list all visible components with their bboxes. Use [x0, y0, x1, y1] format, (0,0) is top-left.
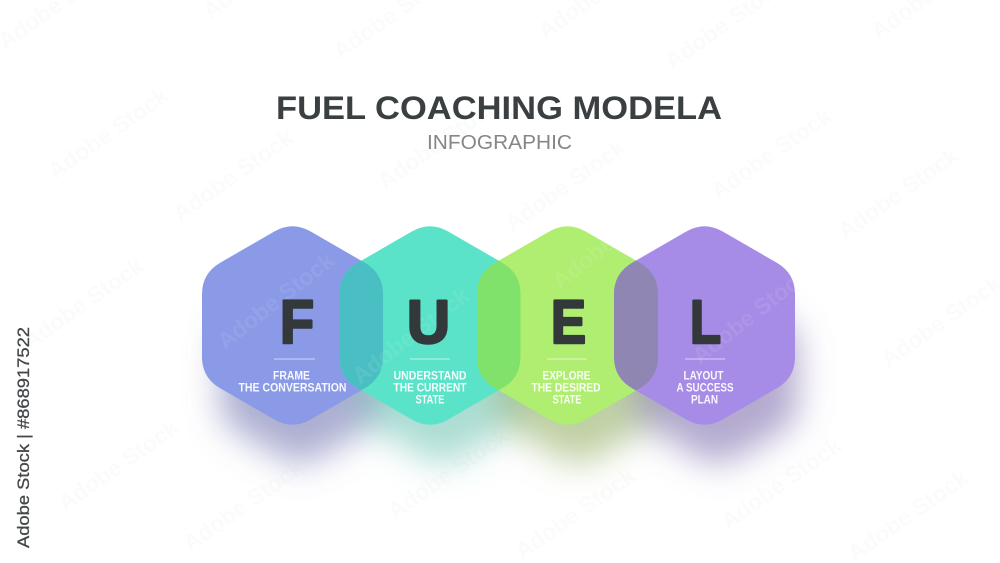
subtitle: INFOGRAPHIC: [427, 132, 572, 154]
letter U: U: [407, 288, 450, 356]
label: explore the desired state: [532, 358, 600, 406]
label: layout a success plan: [676, 358, 734, 406]
watermark pattern on background: Adobe Stock: [500, 134, 630, 236]
watermark pattern on background: Adobe Stock: [510, 462, 640, 563]
label: frame the conversation: FRAME: [273, 370, 310, 382]
side credit text: Adobe Stock | #868917522: [14, 327, 33, 548]
watermark pattern on background: Adobe Stock: [373, 92, 503, 194]
overlap E and L: [614, 260, 658, 390]
label: layout a success plan: LAYOUT: [684, 370, 724, 382]
letter L: L: [690, 288, 721, 356]
watermark over hexagons: Adobe Stock: [212, 247, 339, 354]
label: layout a success plan: PLAN: [691, 394, 718, 406]
watermark pattern on background: Adobe Stock: [53, 414, 183, 516]
watermark over hexagons: Adobe Stock: [347, 282, 474, 389]
label: frame the conversation: [238, 358, 346, 394]
infographic canvas: [16, 96, 819, 548]
label: understand the current state: THE CURRENT: [394, 382, 466, 394]
hexagon L: [614, 226, 795, 425]
watermark over hexagons: Adobe Stock: [687, 262, 814, 369]
overlap F and U: [340, 260, 383, 390]
watermark pattern on background: Adobe Stock: [706, 102, 836, 204]
watermark over hexagons: Adobe Stock: [547, 187, 674, 294]
watermark pattern on background: Adobe Stock: [833, 142, 963, 244]
panel: U understand the current state: [394, 288, 466, 406]
watermark pattern on background: Adobe Stock: [18, 252, 148, 354]
panel: L layout a success plan: [676, 288, 734, 406]
label: layout a success plan: A SUCCESS: [676, 382, 734, 394]
label: explore the desired state: STATE: [552, 394, 582, 406]
label: frame the conversation: THE CONVERSATION: [238, 382, 346, 394]
hexagon shadows: [220, 289, 798, 463]
watermark over hexagons: [212, 187, 814, 389]
hexagon U: [340, 226, 520, 425]
overlap U and E: [477, 260, 520, 390]
watermark pattern on background: Adobe Stock: [383, 422, 513, 524]
watermark pattern on background: Adobe Stock: [43, 82, 173, 184]
label: explore the desired state: EXPLORE: [542, 370, 591, 382]
panel: F frame the conversation: [238, 288, 346, 394]
hexagon F: [202, 226, 383, 425]
watermark pattern on background: Adobe Stock: [716, 432, 846, 534]
title: FUEL COACHING MODELA: [276, 90, 722, 126]
label: understand the current state: [394, 358, 466, 406]
label: explore the desired state: THE DESIRED: [532, 382, 600, 394]
panel: E explore the desired state: [532, 288, 600, 406]
hexagon E: [477, 226, 658, 425]
letter F: F: [280, 288, 314, 356]
label: understand the current state: UNDERSTAND: [394, 370, 466, 382]
label: understand the current state: STATE: [416, 394, 445, 406]
watermark pattern on background: Adobe Stock: [168, 124, 298, 226]
letter E: E: [551, 288, 586, 356]
watermark pattern on background: Adobe Stock: [178, 454, 308, 556]
